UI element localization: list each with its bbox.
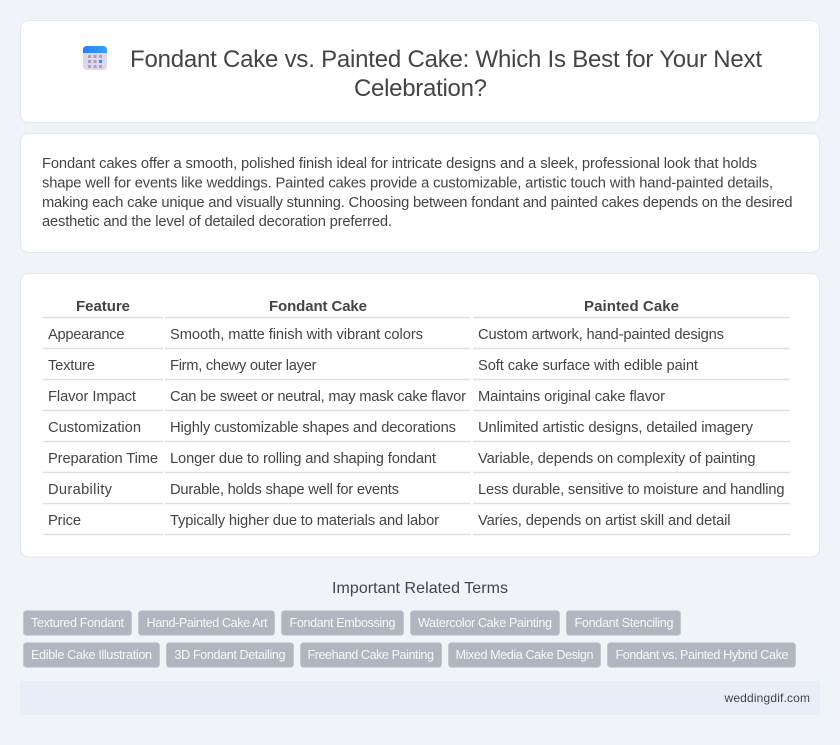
row: preparation time: Preparation Time [48, 451, 158, 467]
row: durability: Durable, holds shape well for events [170, 482, 399, 498]
row: appearance [48, 327, 724, 343]
row: flavor impact: Can be sweet or neutral, may mask cake flavor [170, 389, 466, 405]
table header row [76, 298, 679, 315]
panel: header [20, 20, 820, 122]
tag [24, 643, 160, 667]
tag [608, 643, 796, 667]
related terms tags [24, 611, 796, 667]
row: texture [48, 358, 698, 374]
tag [300, 643, 442, 667]
row: texture: Texture [48, 358, 95, 374]
row: texture: Soft cake surface with edible paint [478, 358, 698, 374]
row: price: Typically higher due to materials and labor [170, 513, 439, 529]
tag: Edible Cake Illustration [31, 648, 152, 662]
tag: Fondant Embossing [290, 616, 396, 630]
heading: important related terms: Important Related Terms [332, 580, 508, 597]
panel: introduction text: shape well for events like weddings. Painted cakes provide a customizable, artistic touch with hand-painted details, [42, 176, 773, 192]
title: Celebration? [354, 75, 487, 102]
row: customization [48, 420, 754, 436]
row: price [48, 513, 730, 529]
row: appearance: Smooth, matte finish with vibrant colors [170, 327, 423, 343]
panel: comparison table [20, 274, 820, 557]
icon: calendar [83, 46, 107, 70]
row: durability: Durability [48, 482, 113, 498]
tag [282, 611, 404, 635]
table header row: Painted Cake [584, 298, 679, 315]
tag: Freehand Cake Painting [308, 648, 434, 662]
tag [566, 611, 680, 635]
tag [138, 611, 274, 635]
row: preparation time: Longer due to rolling and shaping fondant [170, 451, 436, 467]
row: appearance: Custom artwork, hand-painted designs [478, 327, 724, 343]
panel: introduction text [20, 134, 820, 252]
row: durability: Less durable, sensitive to moisture and handling [478, 482, 784, 498]
row: preparation time [48, 451, 756, 467]
row: customization: Unlimited artistic designs, detailed imagery [478, 420, 754, 436]
panel: introduction text: making each cake unique and visually stunning. Choosing between fondant and painted cakes depends on the desired [42, 195, 792, 211]
table header row: Feature [76, 298, 130, 315]
tag: Fondant vs. Painted Hybrid Cake [616, 648, 788, 662]
panel: introduction text: Fondant cakes offer a smooth, polished finish ideal for intricate designs and a sleek, professional look that holds [42, 156, 757, 172]
title: Fondant Cake vs. Painted Cake: Which Is Best for Your Next [130, 46, 762, 73]
tag: Mixed Media Cake Design [456, 648, 594, 662]
tag: Textured Fondant [31, 616, 124, 630]
tag [166, 643, 294, 667]
row: flavor impact [48, 389, 665, 405]
table header row: Fondant Cake [269, 298, 367, 315]
tag: Fondant Stenciling [574, 616, 674, 630]
footer: weddingdif.com [724, 691, 810, 705]
tag [448, 643, 600, 667]
title [130, 46, 762, 102]
tag [24, 611, 132, 635]
tag [410, 611, 560, 635]
row: texture: Firm, chewy outer layer [170, 358, 317, 374]
panel: introduction text: aesthetic and the level of detailed decoration preferred. [42, 214, 392, 230]
row: appearance: Appearance [48, 327, 124, 343]
row: customization: Customization [48, 420, 141, 436]
row: flavor impact: Flavor Impact [48, 389, 136, 405]
row: price: Price [48, 513, 81, 529]
row: price: Varies, depends on artist skill and detail [478, 513, 730, 529]
row: customization: Highly customizable shapes and decorations [170, 420, 456, 436]
tag: 3D Fondant Detailing [174, 648, 286, 662]
row: durability [48, 482, 784, 498]
row: preparation time: Variable, depends on complexity of painting [478, 451, 756, 467]
footer [20, 681, 820, 715]
row: flavor impact: Maintains original cake flavor [478, 389, 665, 405]
tag: Hand-Painted Cake Art [146, 616, 268, 630]
tag: Watercolor Cake Painting [418, 616, 552, 630]
